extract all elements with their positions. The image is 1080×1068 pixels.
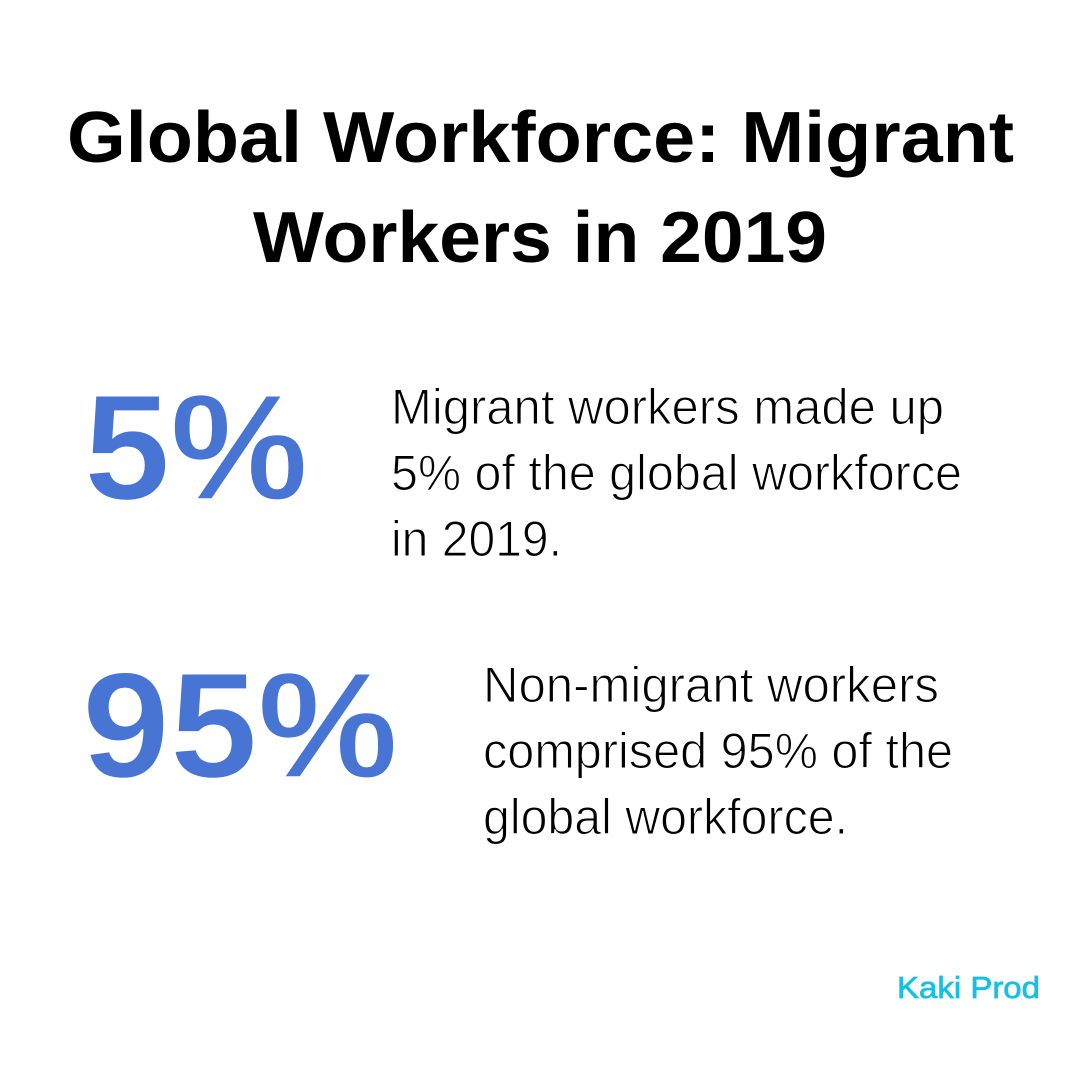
stat: 95%: 95%	[82, 641, 398, 809]
text block: non-migrant workers description: Non-migrant workers	[483, 657, 939, 713]
logo: Kaki Prod: Kaki Prod	[897, 970, 1040, 1005]
title: Global Workforce: Migrant	[67, 98, 1014, 178]
text block: non-migrant workers description: global workforce.	[483, 789, 848, 845]
stat: 5%: 5%	[84, 363, 308, 531]
text block: migrant workers description	[391, 379, 962, 567]
text block: non-migrant workers description: comprised 95% of the	[483, 723, 953, 779]
text block: migrant workers description: in 2019.	[391, 511, 562, 567]
title: Workers in 2019	[253, 198, 827, 278]
text block: non-migrant workers description	[483, 657, 953, 845]
text block: migrant workers description: Migrant workers made up	[391, 379, 944, 435]
text block: migrant workers description: 5% of the global workforce	[391, 445, 962, 501]
title	[67, 98, 1014, 278]
